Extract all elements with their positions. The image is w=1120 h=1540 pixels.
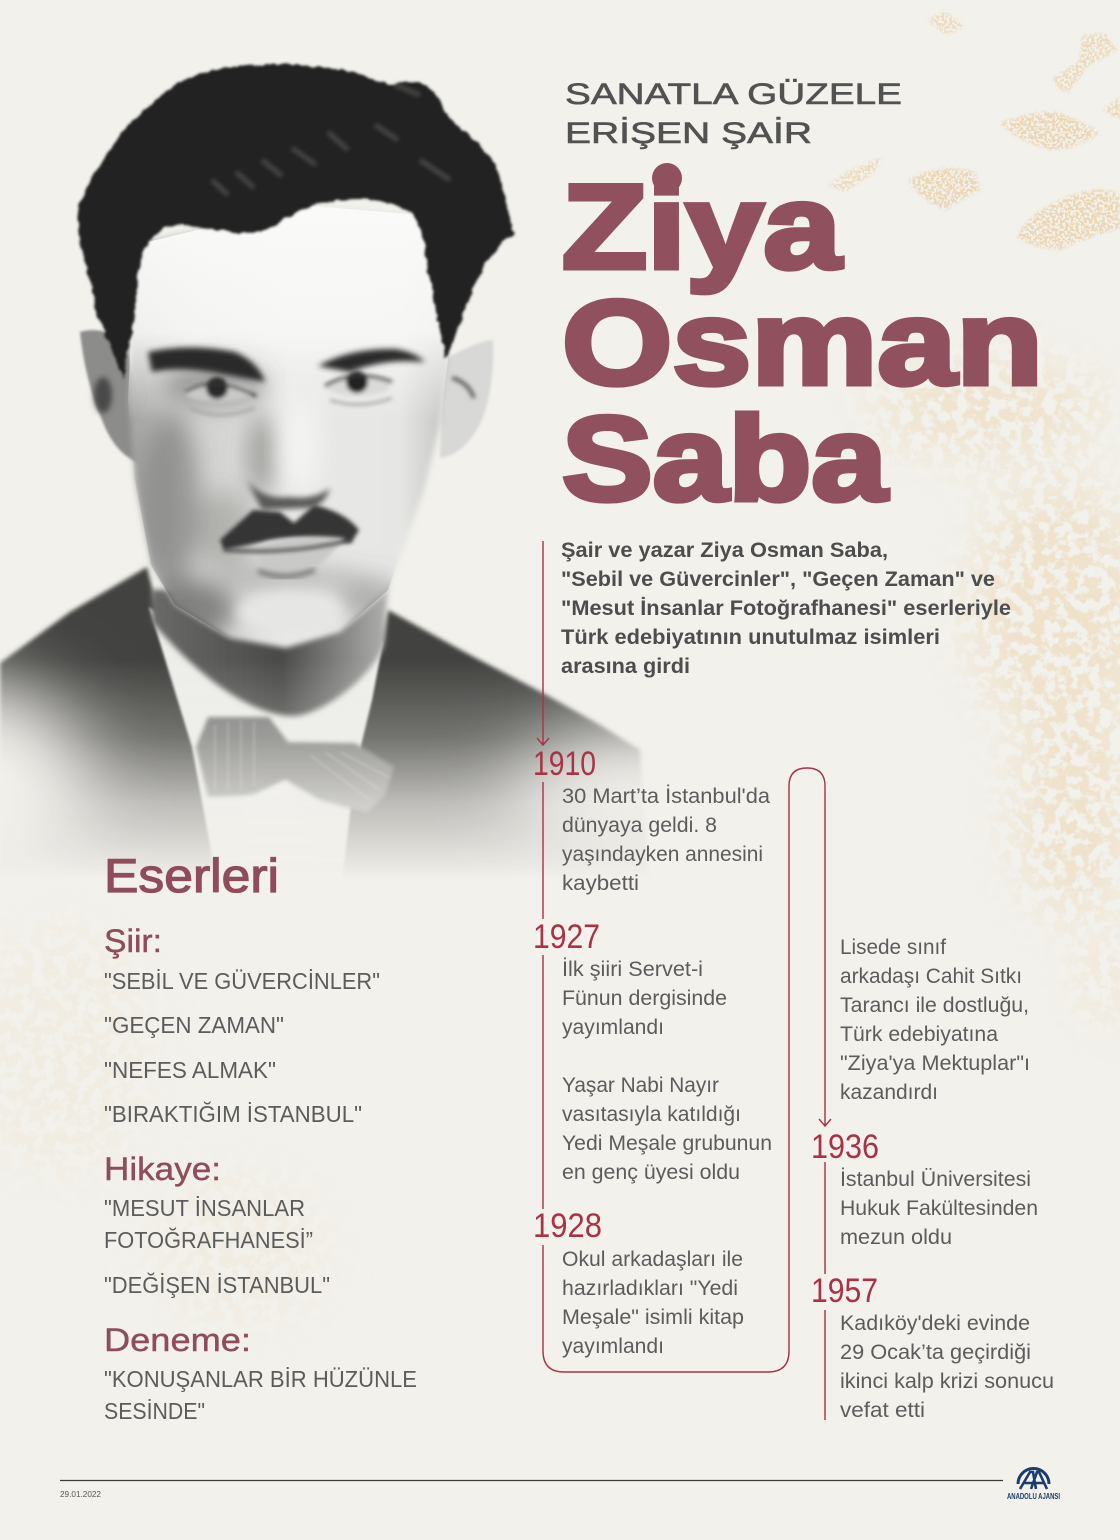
timeline column 1 — [533, 745, 772, 1358]
friendship note: Lisede sınıf — [840, 935, 946, 959]
1910 — [533, 745, 770, 895]
works panel — [104, 849, 417, 1424]
neck shadow — [151, 580, 388, 716]
stories: Hikaye: — [104, 1151, 221, 1187]
1927: Yaşar Nabi Nayır — [562, 1073, 719, 1097]
lower lip shadow — [258, 570, 315, 576]
subtitle: SANATLA GÜZELE — [565, 78, 902, 111]
1910: yaşındayken annesini — [562, 842, 763, 866]
timeline column 2 — [811, 935, 1054, 1422]
1957: 29 Ocak’ta geçirdiği — [840, 1340, 1031, 1364]
timeline line and arrows — [537, 541, 831, 1420]
ear shadow — [94, 377, 112, 413]
1936 — [811, 1128, 1038, 1249]
main name — [562, 160, 1043, 526]
1927: yayımlandı — [562, 1015, 664, 1039]
1928: Meşale" isimli kitap — [562, 1305, 744, 1329]
1928: Okul arkadaşları ile — [562, 1247, 743, 1271]
1927: vasıtasıyla katıldığı — [562, 1102, 741, 1126]
right ear shadow — [452, 378, 474, 398]
essays: SESİNDE" — [104, 1398, 205, 1424]
main name: Osman — [562, 276, 1043, 410]
1910: kaybetti — [562, 871, 639, 895]
friendship note: arkadaşı Cahit Sıtkı — [840, 964, 1022, 988]
friendship note: Tarancı ile dostluğu, — [840, 993, 1029, 1017]
1957: vefat etti — [840, 1398, 925, 1422]
eyes — [184, 371, 392, 415]
essays — [104, 1322, 417, 1424]
subtitle — [565, 78, 902, 150]
1936: mezun oldu — [840, 1225, 952, 1249]
shirt below tie — [254, 782, 281, 795]
1927: Yedi Meşale grubunun — [562, 1131, 772, 1155]
1928: yayımlandı — [562, 1334, 664, 1358]
main name: Ziya — [562, 160, 842, 294]
poetry — [104, 923, 380, 1127]
facial shading — [120, 200, 460, 640]
footer — [60, 1468, 1060, 1501]
friendship note — [840, 935, 1030, 1104]
mouth line — [224, 540, 351, 551]
hair highlights — [212, 85, 450, 195]
1910: 30 Mart’ta İstanbul'da — [562, 784, 770, 808]
1927 — [533, 918, 772, 1184]
friendship note: kazandırdı — [840, 1080, 938, 1104]
friendship note: "Ziya'ya Mektuplar"ı — [840, 1051, 1030, 1075]
1928 — [533, 1207, 744, 1358]
portrait photo — [0, 64, 650, 900]
works heading: Eserleri — [104, 849, 279, 902]
intro text: Şair ve yazar Ziya Osman Saba, — [561, 538, 888, 562]
bow tie — [196, 717, 394, 813]
1927: en genç üyesi oldu — [562, 1160, 740, 1184]
1936: Hukuk Fakültesinden — [840, 1196, 1038, 1220]
icon: Anadolu Ajansi logo: ANADOLU AJANSI — [1007, 1492, 1060, 1501]
jacket — [0, 567, 650, 900]
1936: İstanbul Üniversitesi — [840, 1167, 1031, 1191]
poetry: "NEFES ALMAK" — [104, 1057, 276, 1083]
date: 29.01.2022 — [60, 1490, 102, 1499]
1957: ikinci kalp krizi sonucu — [840, 1369, 1054, 1393]
left ear — [78, 328, 137, 462]
intro text — [561, 538, 1011, 678]
stories — [104, 1151, 330, 1298]
1927: İlk şiiri Servet-i — [562, 957, 703, 981]
stories: "MESUT İNSANLAR — [104, 1195, 305, 1221]
eyebrows — [148, 348, 425, 382]
1928: hazırladıkları "Yedi — [562, 1276, 738, 1300]
1936: 1936 — [811, 1128, 879, 1166]
1927: 1927 — [533, 918, 600, 956]
stories: FOTOĞRAFHANESİ” — [104, 1227, 313, 1253]
1910: 1910 — [533, 745, 596, 783]
1928: 1928 — [533, 1207, 602, 1245]
essays: "KONUŞANLAR BİR HÜZÜNLE — [104, 1366, 417, 1392]
icon: Anadolu Ajansi logo — [1007, 1468, 1060, 1501]
shirt — [148, 606, 388, 868]
main name: Saba — [562, 392, 888, 526]
face — [128, 205, 448, 648]
1957: 1957 — [811, 1272, 878, 1310]
intro text: arasına girdi — [561, 654, 690, 678]
intro text: "Mesut İnsanlar Fotoğrafhanesi" eserleriyle — [561, 596, 1011, 620]
hair — [77, 64, 513, 380]
subtitle: ERİŞEN ŞAİR — [565, 117, 812, 150]
right ear — [440, 340, 493, 458]
intro text: "Sebil ve Güvercinler", "Geçen Zaman" ve — [561, 567, 995, 591]
poetry: Şiir: — [104, 923, 162, 959]
title block — [562, 78, 1043, 526]
1957 — [811, 1272, 1054, 1422]
moustache — [220, 505, 359, 550]
poetry: "SEBİL VE GÜVERCİNLER" — [104, 968, 380, 994]
1957: Kadıköy'deki evinde — [840, 1311, 1030, 1335]
1910: dünyaya geldi. 8 — [562, 813, 717, 837]
stories: "DEĞİŞEN İSTANBUL" — [104, 1272, 330, 1298]
mouth — [260, 533, 346, 566]
1927: Fünun dergisinde — [562, 986, 727, 1010]
tie plaid — [214, 721, 364, 768]
poetry: "GEÇEN ZAMAN" — [104, 1012, 284, 1038]
intro text: Türk edebiyatının unutulmaz isimleri — [561, 625, 940, 649]
poetry: "BIRAKTIĞIM İSTANBUL" — [104, 1101, 362, 1127]
friendship note: Türk edebiyatına — [840, 1022, 998, 1046]
essays: Deneme: — [104, 1322, 251, 1358]
nose base — [247, 480, 330, 510]
